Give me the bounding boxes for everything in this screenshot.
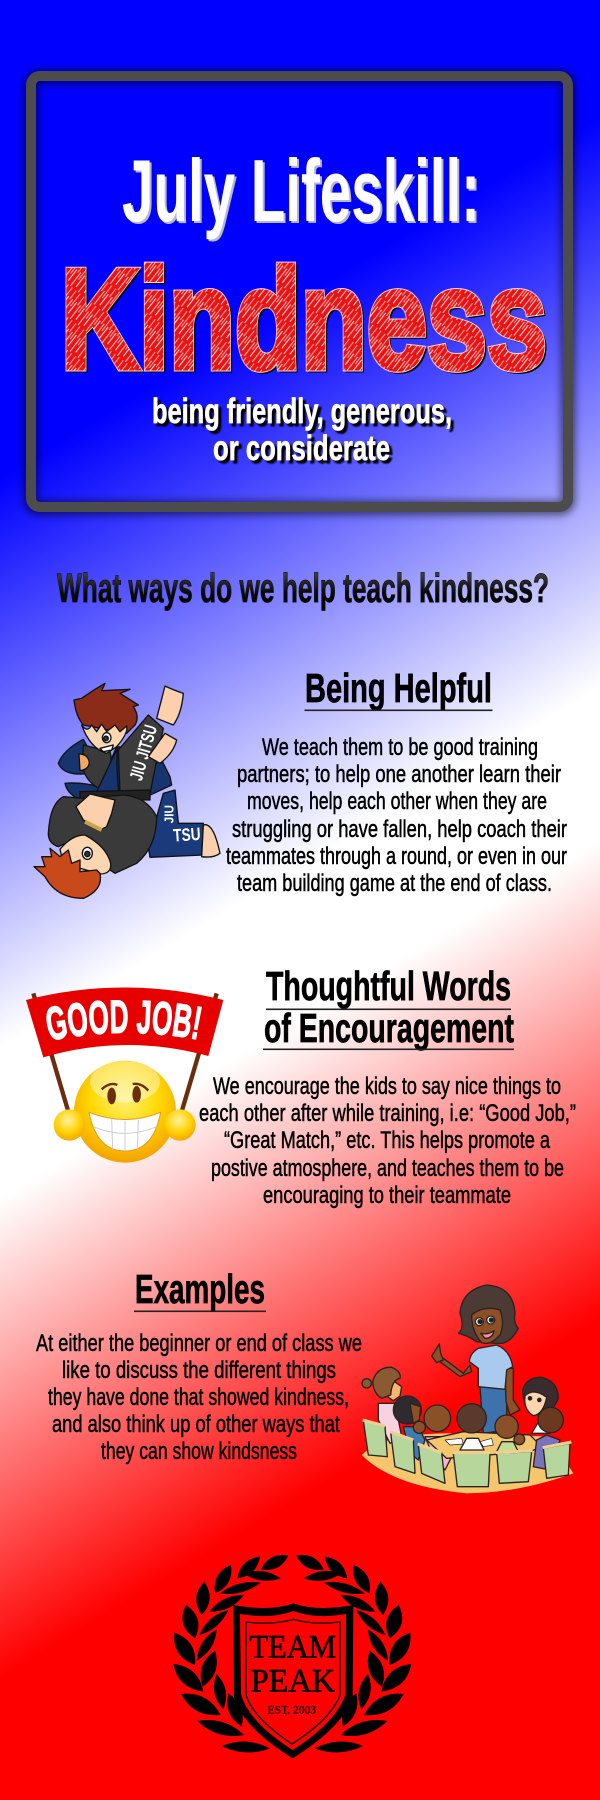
heading: Examples [134,1266,266,1312]
panel: title frame [31,76,568,508]
subtitle: definition: being friendly, generous, [152,392,452,431]
subtitle: definition [152,392,455,471]
illustration: teacher and students [362,1285,573,1493]
logo: Team Peak crest: PEAK [251,1664,335,1700]
subtitle: definition: or considerate [213,429,390,468]
heading: Thoughtful Words of Encouragement [263,963,514,1051]
text block: examples: and also think up of other ways that [52,1411,340,1438]
text block: examples: they can show kindsness [101,1438,297,1465]
text block: examples: they have done that showed kindness, [48,1384,349,1411]
icon: good job smiley: GOOD JOB! [46,1000,202,1040]
text block: examples: At either the beginner or end of class we [36,1330,362,1357]
illustration: jiu jitsu kids: JIU [162,805,176,823]
text block: being helpful [226,734,567,897]
illustration: jiu jitsu kids: JIU JITSU [125,723,161,783]
illustration: jiu jitsu kids: TSU [173,824,201,846]
heading: Being Helpful: Being Helpful [305,665,492,711]
heading: Examples: Examples [135,1266,265,1312]
icon: good job smiley [26,988,224,1163]
text block: examples: like to discuss the different things [62,1357,336,1384]
text block: encouragement: encouraging to their teammate [263,1182,511,1209]
logo: Team Peak crest: TEAM [249,1629,336,1665]
text block: encouragement [199,1073,576,1209]
logo: Team Peak crest: EST. 2003 [268,1704,316,1716]
subtitle: definition: or considerate [216,432,393,471]
subtitle: definition: being friendly, generous, [155,395,455,434]
text block: examples [36,1330,362,1465]
illustration: jiu jitsu kids [34,683,220,898]
logo: Team Peak crest [173,1555,411,1758]
